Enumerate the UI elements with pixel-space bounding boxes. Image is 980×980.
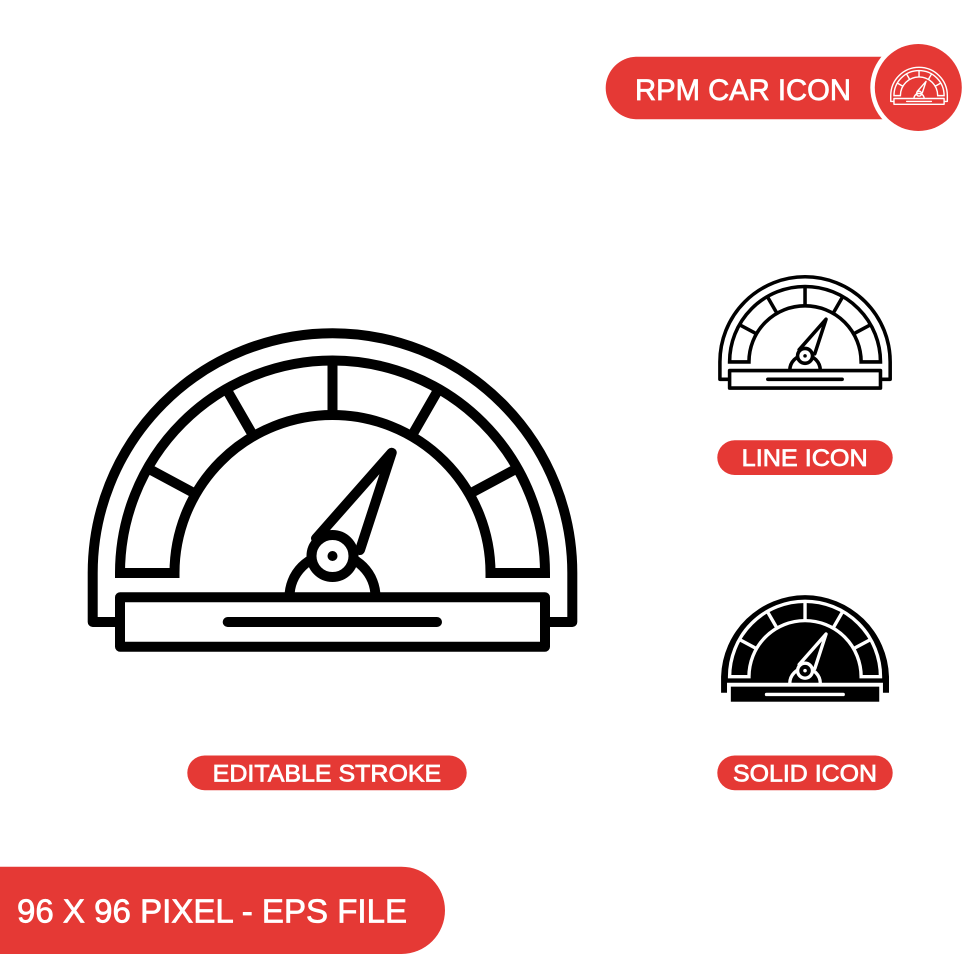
needle mount [290,554,376,597]
title text: RPM CAR ICON [635,74,851,107]
solid gauge base [731,687,879,702]
label: editable stroke [187,756,467,790]
large line gauge icon [93,333,572,647]
solid needle mount [790,668,820,683]
footer banner: file format: 96 X 96 PIXEL - EPS FILE [17,894,407,931]
label: editable stroke: EDITABLE STROKE [213,761,441,788]
small line gauge icon [720,277,890,388]
gauge scale ticks [151,361,514,494]
solid gauge icon [721,595,889,702]
hub centre dot [328,551,338,561]
solid gauge ticks [741,601,869,649]
gauge base [120,597,545,647]
gauge outer housing [93,333,572,622]
base slot [228,617,437,627]
solid base slot [767,690,843,699]
solid gauge body [721,595,889,693]
label: line icon [717,440,893,475]
label: line icon: LINE ICON [742,445,868,472]
gauge scale band [120,360,545,573]
footer banner: file format [0,867,445,954]
needle [316,453,392,550]
label: solid icon [717,756,893,790]
title badge: RPM car icon [606,40,966,136]
badge circle separator [870,40,966,136]
title pill [606,57,885,119]
solid needle [799,634,826,669]
badge circle [875,44,962,131]
solid hub dot [803,669,807,672]
label: solid icon: SOLID ICON [733,761,877,788]
solid gauge band outline [730,601,880,677]
solid needle hub [798,663,812,678]
needle hub [312,535,354,577]
icon: mini gauge in badge [891,67,947,104]
